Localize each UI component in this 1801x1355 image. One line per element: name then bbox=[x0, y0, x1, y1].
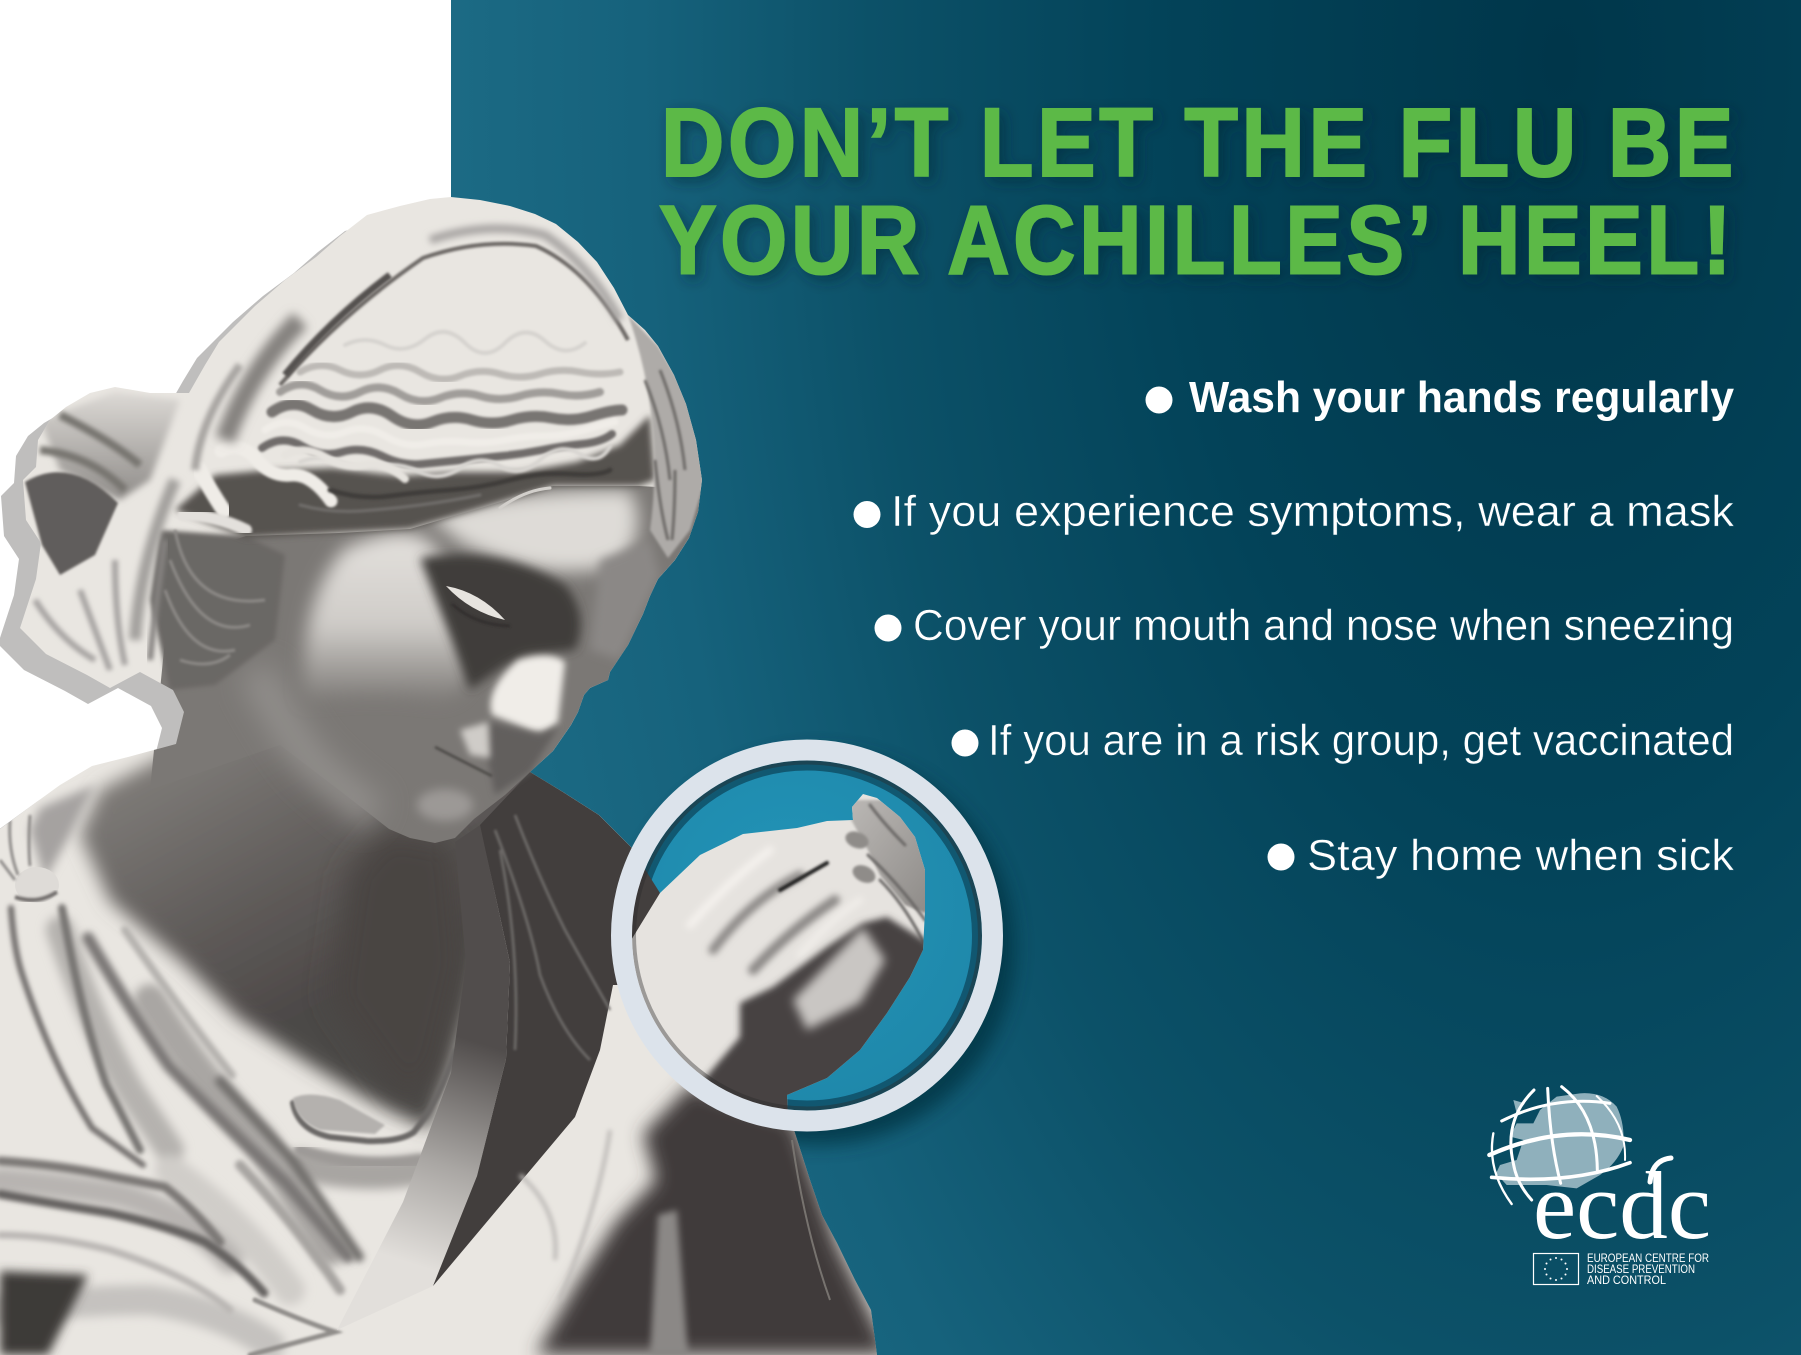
upper lip light bbox=[460, 722, 490, 758]
shoulder pin bbox=[0, 815, 59, 903]
tip: wear a mask: If you experience symptoms, wear a mask bbox=[891, 487, 1735, 536]
dark right side of forearm bbox=[536, 1085, 890, 1355]
organisation name: DISEASE PREVENTION bbox=[1587, 1264, 1695, 1276]
forearm veins bbox=[520, 1130, 610, 1300]
under-nose shadow bbox=[488, 722, 560, 795]
neck highlight bbox=[255, 670, 375, 815]
ECDC logo bbox=[1489, 1087, 1711, 1287]
ring drop shadow bbox=[621, 751, 1015, 1145]
dark fold lower left bbox=[0, 1271, 88, 1355]
fingertips bbox=[843, 828, 878, 886]
drape fold over chest bbox=[0, 908, 455, 1355]
eye bbox=[446, 586, 510, 626]
magnifier ring bbox=[622, 750, 992, 1121]
globe bbox=[1489, 1087, 1630, 1204]
upper finger bbox=[840, 800, 930, 915]
hand base bbox=[600, 780, 940, 1130]
strap of drapery bbox=[337, 825, 510, 1330]
thin ring shade over hand bbox=[634, 762, 980, 1108]
magnified hand bbox=[600, 780, 940, 1130]
hand and wrist bbox=[600, 780, 940, 1130]
nose highlight bbox=[490, 655, 565, 731]
forehead light bbox=[428, 490, 638, 571]
teal background panel bbox=[451, 0, 1801, 1355]
hand dark palm shadow bbox=[695, 917, 940, 1130]
broad drapery shading bbox=[0, 930, 420, 1345]
swan neck of the d bbox=[1650, 1158, 1671, 1182]
back hair bbox=[150, 530, 285, 690]
cheek light bbox=[304, 533, 472, 700]
organisation name bbox=[1587, 1253, 1709, 1287]
magnifier inner disc bbox=[631, 760, 983, 1112]
forearm highlight bbox=[650, 1210, 688, 1355]
neck and chest shadow bbox=[80, 640, 560, 1130]
oval swag fold bbox=[293, 1094, 385, 1134]
finger creases bbox=[690, 805, 925, 970]
hair waves bbox=[183, 332, 622, 530]
wrist shade bbox=[640, 1050, 710, 1120]
dark drape on the right shoulder bbox=[433, 772, 632, 1286]
title bbox=[659, 88, 1737, 294]
right side hair bbox=[628, 315, 705, 558]
organisation name: EUROPEAN CENTRE FOR bbox=[1587, 1253, 1709, 1265]
organisation name: AND CONTROL bbox=[1587, 1275, 1667, 1287]
statue bbox=[0, 150, 900, 1355]
shoulder wedge behind hand bbox=[620, 835, 660, 985]
dark hair band bbox=[175, 415, 655, 538]
tip list bbox=[854, 373, 1735, 880]
ecdc wordmark: ecdc bbox=[1533, 1152, 1711, 1259]
tip: cover mouth: Cover your mouth and nose when sneezing bbox=[913, 601, 1734, 650]
magnifier inner dark band bbox=[637, 766, 977, 1106]
tip: wash hands: Wash your hands regularly bbox=[1189, 373, 1735, 422]
statue cast shadow bbox=[0, 230, 348, 829]
EU flag bbox=[1534, 1254, 1578, 1284]
deep shadow under chin bbox=[340, 828, 466, 1090]
temple shade bbox=[590, 540, 660, 660]
tip: get vaccinated: If you are in a risk group, get vaccinated bbox=[988, 716, 1734, 765]
shoulder shadow bbox=[30, 785, 95, 880]
hair bun bbox=[25, 392, 180, 670]
veil shading bbox=[135, 320, 300, 660]
lips bbox=[435, 747, 492, 776]
neck and face base bbox=[150, 486, 710, 843]
veil inner edge bbox=[280, 229, 628, 385]
chin highlight bbox=[417, 789, 473, 821]
eye socket shadow bbox=[420, 555, 581, 690]
palm light patch bbox=[793, 927, 885, 1030]
statue base marble bbox=[0, 150, 900, 1355]
tip: stay home: Stay home when sick bbox=[1307, 831, 1735, 880]
